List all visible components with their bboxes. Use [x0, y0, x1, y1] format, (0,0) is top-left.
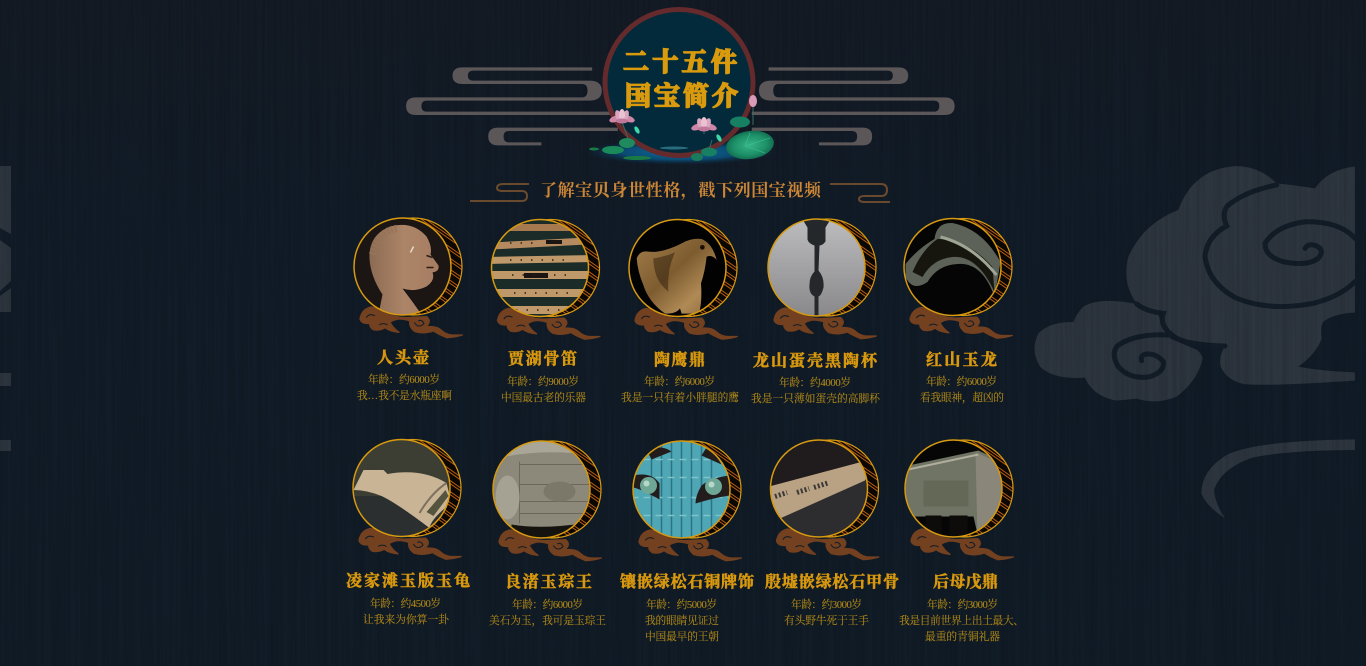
photo: head vessel [352, 216, 452, 316]
name: 后母戊鼎 [933, 573, 998, 591]
description: 我是目前世界上出土最大、 [899, 614, 1024, 627]
description: 我…我不是水瓶座啊 [357, 389, 452, 402]
photo: black pottery cup [766, 218, 866, 318]
photo: bone flutes [489, 218, 590, 318]
name: 凌家滩玉版玉龟 [346, 571, 470, 590]
medallion backing [359, 440, 461, 559]
medallion backing [639, 441, 741, 561]
subtitle [470, 180, 890, 202]
description [899, 598, 1024, 643]
description [621, 375, 739, 404]
item: 良渚玉琮王 [489, 440, 606, 627]
item: 龙山蛋壳黑陶杯 [751, 218, 880, 405]
description: 我的眼睛见证过 [645, 614, 719, 627]
description: 看我眼神，超凶的 [920, 391, 1004, 404]
description: 年龄：约3000岁 [791, 598, 862, 611]
description: 年龄：约6000岁 [368, 373, 440, 386]
name: 镶嵌绿松石铜牌饰 [620, 572, 754, 591]
description: 年龄：约3000岁 [927, 598, 998, 611]
name: 良渚玉琮王 [505, 572, 592, 591]
medallion backing [774, 219, 876, 339]
description: 年龄：约5000岁 [646, 598, 717, 611]
photo: bronze ding [904, 438, 1004, 538]
medallion backing [499, 441, 601, 561]
item: 陶鹰鼎 [621, 218, 739, 404]
description [489, 598, 606, 627]
description: 我是一只有着小胖腿的鹰 [621, 391, 739, 404]
description [751, 376, 880, 405]
name: 人头壶 [377, 348, 429, 367]
description: 年龄：约4000岁 [779, 376, 851, 389]
decorative clouds: left [406, 67, 618, 145]
background cloud: left edge [0, 166, 11, 451]
description: 年龄：约4500岁 [370, 597, 441, 610]
description: 让我来为你算一卦 [363, 613, 449, 626]
description: 美石为玉，我可是玉琮王 [489, 614, 606, 627]
description [501, 375, 586, 404]
description: 有头野牛死于王手 [784, 614, 869, 627]
description: 年龄：约6000岁 [644, 375, 715, 388]
description: 年龄：约6000岁 [512, 598, 583, 611]
name: 殷墟嵌绿松石甲骨 [765, 572, 899, 591]
item: 人头壶 [352, 216, 462, 402]
photo: jade dragon [902, 217, 1002, 317]
decorative clouds: right [752, 67, 955, 145]
medallion backing [910, 218, 1012, 338]
photo: turquoise plaque [632, 440, 732, 540]
item: 镶嵌绿松石铜牌饰 [620, 440, 754, 643]
pond water [584, 139, 776, 165]
lotus flowers [608, 95, 757, 132]
description: 中国最早的王朝 [645, 630, 719, 643]
photo: eagle vessel [628, 218, 728, 318]
medallion backing [911, 440, 1013, 560]
description [920, 375, 1004, 404]
title roundel [605, 10, 753, 156]
description: 最重的青铜礼器 [925, 630, 1000, 643]
item: 殷墟嵌绿松石甲骨 [765, 438, 899, 627]
ornament: left [470, 184, 529, 201]
medallion backing [776, 440, 879, 560]
header emblem [406, 10, 955, 165]
description: 我是一只薄如蛋壳的高脚杯 [751, 392, 880, 405]
lotus leaves [589, 100, 776, 162]
description [363, 597, 449, 626]
photo: jade turtle [352, 438, 452, 540]
photo: oracle bone [769, 438, 869, 538]
name: 红山玉龙 [926, 351, 997, 369]
name: 龙山蛋壳黑陶杯 [753, 351, 879, 370]
item: 凌家滩玉版玉龟 [346, 438, 470, 626]
description [645, 598, 719, 643]
description [357, 373, 452, 402]
subtitle text: 了解宝贝身世性格，戳下列国宝视频 [540, 180, 822, 201]
description [784, 598, 869, 627]
name: 陶鹰鼎 [654, 350, 705, 369]
header emblem: 国宝简介 [625, 82, 738, 111]
description: 年龄：约6000岁 [926, 375, 997, 388]
medallion backing [360, 218, 462, 338]
item: 贾湖骨笛 [489, 218, 600, 404]
ornament: right [830, 184, 890, 202]
photo: jade cong [492, 440, 592, 540]
item: 红山玉龙 [902, 217, 1012, 404]
medallion backing [635, 220, 737, 339]
description: 年龄：约9000岁 [507, 375, 579, 388]
description: 中国最古老的乐器 [501, 391, 586, 404]
name: 贾湖骨笛 [508, 349, 577, 368]
medallion backing [497, 220, 600, 339]
background cloud: right [1035, 166, 1363, 518]
title text: 二十五件 [623, 48, 737, 77]
item: 后母戊鼎 [899, 438, 1024, 643]
